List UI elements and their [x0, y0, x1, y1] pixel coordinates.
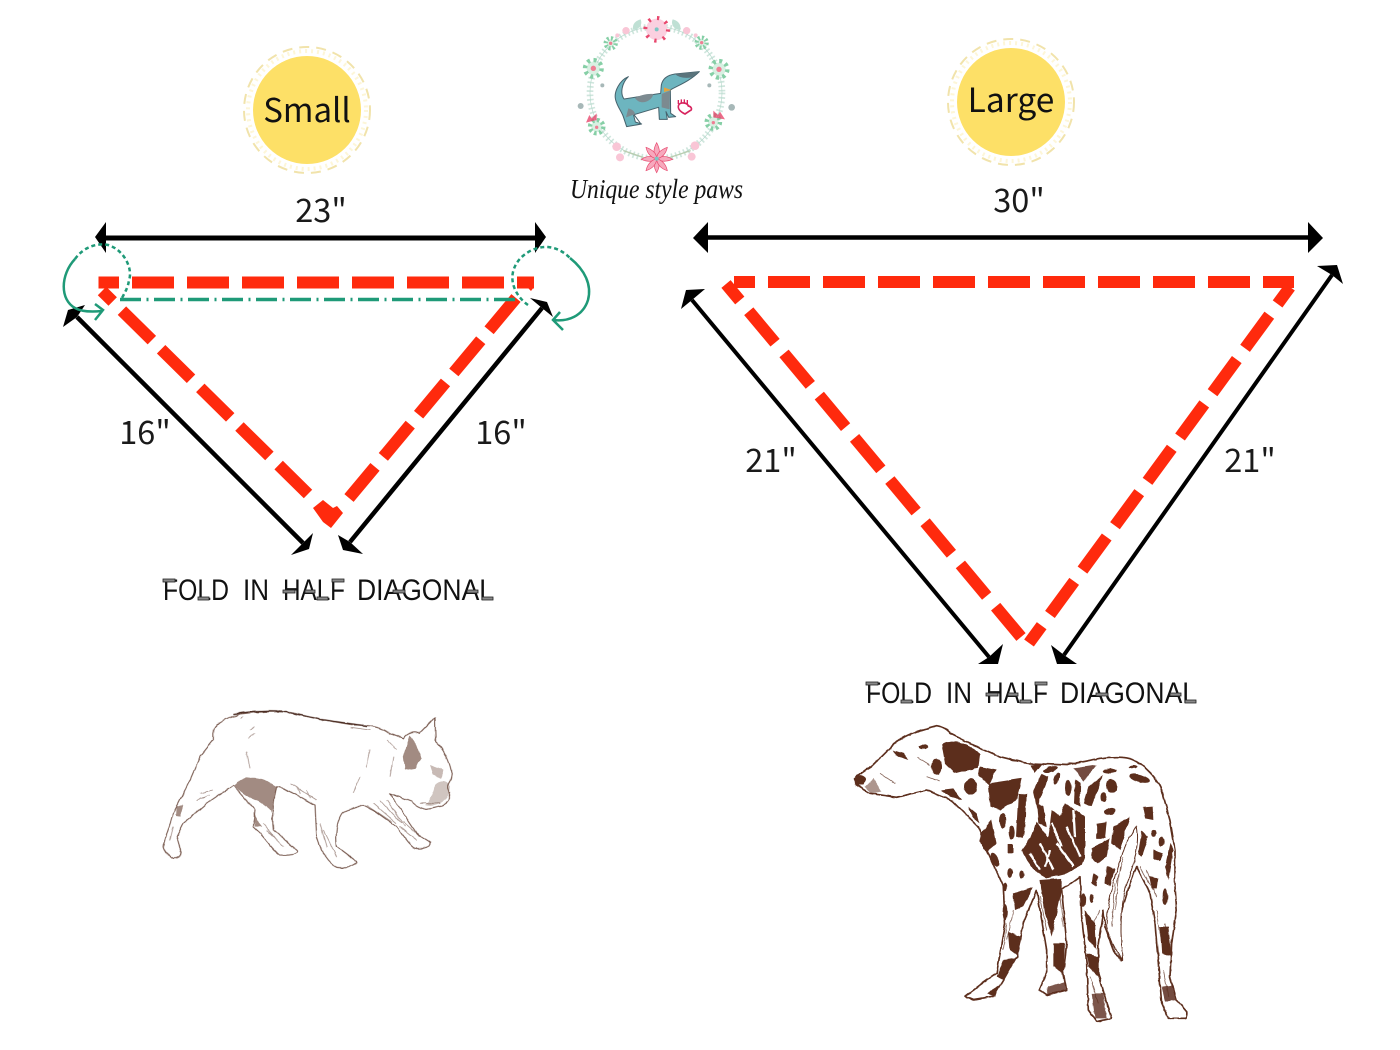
label: 23 inches: 23" — [295, 185, 347, 232]
caption: fold in half diagonal (large) — [866, 677, 1197, 710]
wreath leaves — [590, 19, 722, 159]
small triangle: green fold line and fold arrows — [64, 244, 589, 330]
caption: fold in half diagonal (large): IN — [946, 677, 972, 710]
small triangle: top arrow — [95, 222, 546, 253]
label: 30 inches: 30" — [993, 175, 1045, 222]
badge: Small — [244, 47, 370, 173]
small triangle: left arrow — [63, 305, 313, 555]
large triangle: red dashed stitching — [726, 282, 1294, 643]
caption: fold in half diagonal (small): DIAGONAL — [357, 574, 494, 607]
caption: fold in half diagonal (large): HALF — [986, 677, 1048, 710]
label: 16 inches left: 16" — [119, 407, 171, 454]
badge: Small: Small — [263, 84, 351, 132]
white streaks breaking up the chest patch — [1030, 810, 1080, 870]
caption: fold in half diagonal (large): FOLD — [866, 677, 932, 710]
caption: fold in half diagonal (large): DIAGONAL — [1060, 677, 1197, 710]
small triangle: right arrow — [338, 298, 553, 554]
badge: Large: Large — [968, 73, 1054, 122]
caption: fold in half diagonal (small): FOLD — [163, 574, 229, 607]
label: 21 inches left: 21" — [745, 435, 797, 482]
shading: hatching — [170, 717, 440, 857]
large triangle: top arrow — [693, 222, 1323, 253]
small triangle: red dashed stitching — [98, 277, 534, 528]
caption: fold in half diagonal (small) — [163, 574, 494, 607]
logo: Unique style paws: Unique style paws — [570, 174, 743, 204]
shading: belly and near leg — [176, 735, 450, 827]
large triangle: left arrow — [681, 289, 1003, 664]
small pink flowers — [612, 27, 699, 161]
bottom flower — [641, 143, 673, 173]
logo: Unique style paws — [570, 18, 743, 204]
caption: fold in half diagonal (small): IN — [243, 574, 269, 607]
fine hatching — [880, 757, 1168, 1003]
mint flowers — [587, 39, 726, 132]
illustration: dalmatian — [854, 726, 1187, 1022]
label: 21 inches right: 21" — [1224, 435, 1276, 482]
tail — [1107, 827, 1138, 960]
large triangle: right arrow — [1051, 265, 1343, 664]
label: 16 inches right: 16" — [475, 407, 527, 454]
top flower — [645, 18, 668, 41]
spots — [854, 742, 1177, 1018]
illustration: french bulldog — [163, 711, 452, 867]
badge: Large — [948, 39, 1074, 165]
logo dog — [615, 72, 699, 127]
caption: fold in half diagonal (small): HALF — [283, 574, 345, 607]
